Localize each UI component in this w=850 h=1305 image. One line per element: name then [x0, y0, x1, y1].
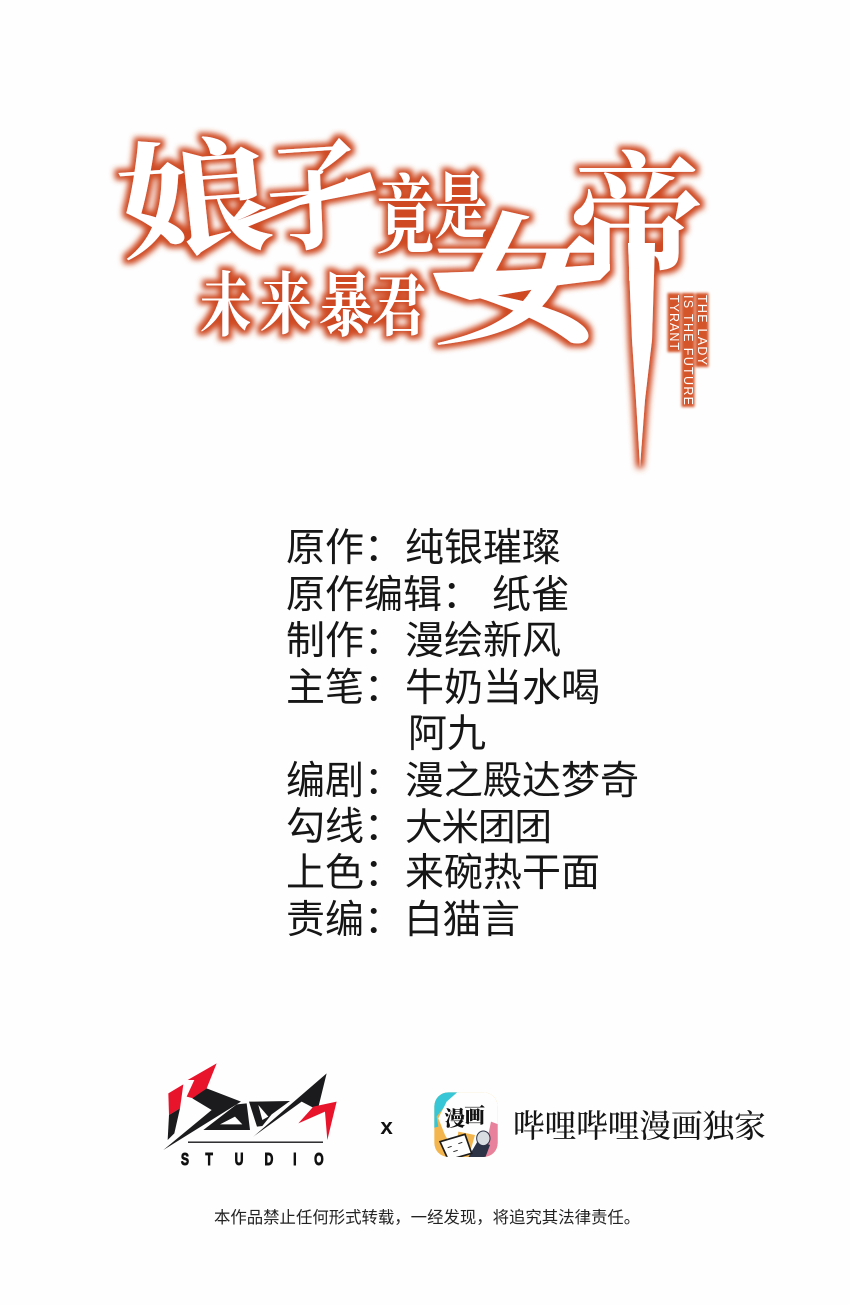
- subtitle tag: english title: IS THE FUTURE: [681, 295, 695, 405]
- credit: production: 制作：: [286, 610, 403, 666]
- title logo: 娘子竟是未来暴君女帝: 来: [260, 251, 311, 348]
- copyright notice: 本作品禁止任何形式转载，一经发现，将追究其法律责任。: [214, 1204, 640, 1228]
- logo text: STUDIO: STUDIO: [181, 1150, 324, 1170]
- credit: colour: 上色：: [286, 842, 403, 898]
- credit value: original editor: 纸雀: [492, 564, 570, 620]
- credit value: editor: 白猫言: [404, 888, 520, 944]
- title logo: 娘子竟是未来暴君女帝: 君: [372, 254, 426, 350]
- subtitle tag: english title: THE LADY: [695, 295, 709, 366]
- icon: bilibili comics app: [434, 1092, 498, 1157]
- credit value: lead artist: 牛奶当水喝: [405, 656, 600, 712]
- title logo: 娘子竟是未来暴君女帝: 竟: [376, 148, 435, 270]
- credit value: second lead artist: 阿九: [408, 703, 486, 759]
- title logo: 娘子竟是未来暴君女帝: 娘: [107, 96, 280, 287]
- credit value: original author: 纯银璀璨: [405, 517, 561, 573]
- credit: screenwriter: 编剧：: [286, 750, 403, 806]
- credit value: colour: 来碗热干面: [405, 842, 600, 898]
- icon: bilibili comics app: 画: [464, 1098, 485, 1128]
- credit: lead artist: 主笔：: [286, 656, 403, 712]
- separator: x mark: x: [380, 1116, 393, 1141]
- credit: original editor: 原作编辑：: [286, 564, 481, 620]
- title logo: 娘子竟是未来暴君女帝: 女: [433, 168, 610, 373]
- credit: line art: 大米团团: [405, 796, 551, 850]
- brand text: 哔哩哔哩漫画独家: [513, 1102, 766, 1147]
- credit value: production: 漫绘新风: [405, 610, 561, 666]
- credit label: line art: 勾线：: [286, 796, 403, 852]
- title logo: 娘子竟是未来暴君女帝: 子: [262, 98, 367, 277]
- credit value: screenwriter: 漫之殿达梦奇: [405, 750, 639, 806]
- title logo: 娘子竟是未来暴君女帝: 暴: [319, 251, 373, 350]
- credit: original author: 原作：: [286, 517, 403, 573]
- title logo: 娘子竟是未来暴君女帝: 帝: [570, 108, 703, 308]
- credit: editor: 责编：: [286, 888, 403, 944]
- title logo: 娘子竟是未来暴君女帝: 是: [435, 149, 487, 254]
- icon: bilibili comics app: 漫: [444, 1102, 465, 1132]
- title logo: 娘子竟是未来暴君女帝: 未: [200, 249, 251, 351]
- title logo: 娘子竟是未来暴君女帝: [107, 96, 710, 474]
- subtitle tag: english title: [667, 293, 709, 407]
- subtitle tag: english title: TYRANT: [667, 295, 681, 350]
